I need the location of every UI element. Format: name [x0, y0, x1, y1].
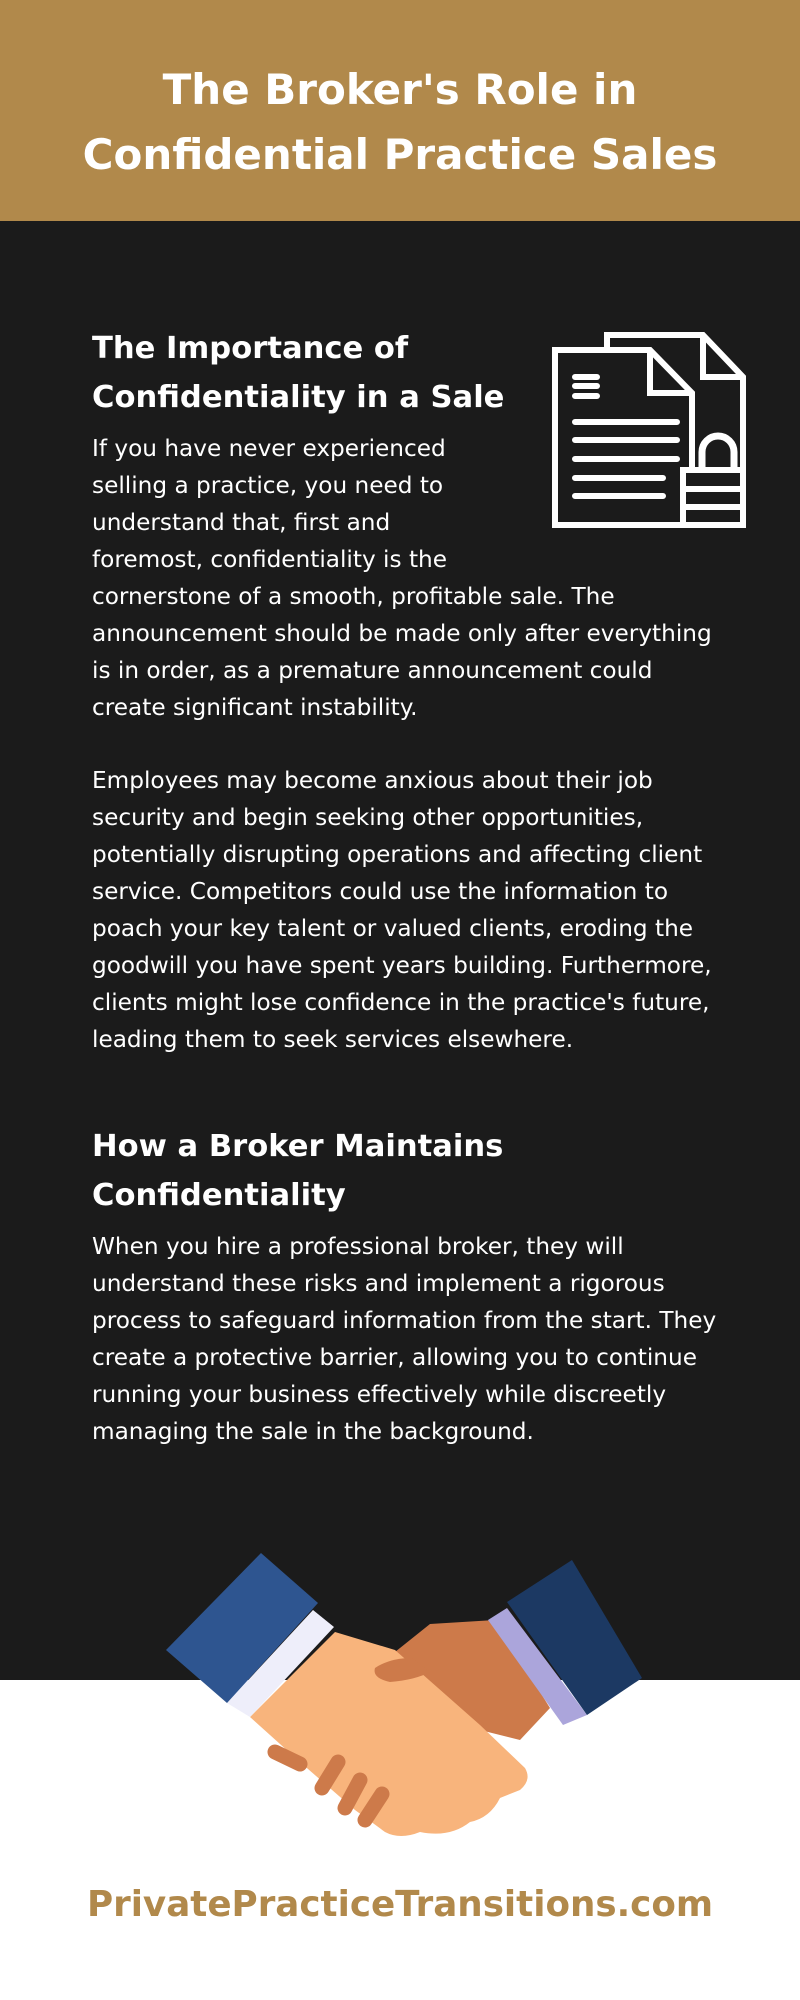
paragraph 1: cornerstone of a smooth, profitable sale. The [92, 583, 615, 610]
paragraph 2 [92, 767, 712, 1053]
heading: importance of confidentiality: Confidentiality in a Sale [92, 380, 504, 415]
paragraph 3: managing the sale in the background. [92, 1418, 534, 1445]
paragraph 2: clients might lose confidence in the practice's future, [92, 989, 710, 1016]
paragraph 3: process to safeguard information from the start. They [92, 1307, 716, 1334]
paragraph 3 [92, 1233, 716, 1445]
icon: handshake [166, 1553, 642, 1836]
heading: importance of confidentiality: The Importance of [92, 331, 408, 366]
dark content panel [0, 221, 800, 1680]
paragraph 1: understand that, first and [92, 509, 390, 536]
paragraph 1: announcement should be made only after everything [92, 620, 712, 647]
paragraph 2: potentially disrupting operations and affecting client [92, 841, 702, 868]
heading: how a broker maintains confidentiality: Confidentiality [92, 1178, 346, 1213]
title [83, 64, 717, 178]
title: The Broker's Role in [163, 64, 637, 114]
paragraph 1: If you have never experienced [92, 435, 446, 462]
paragraph 2: service. Competitors could use the information to [92, 878, 668, 905]
paragraph 2: poach your key talent or valued clients, eroding the [92, 915, 693, 942]
paragraph 2: leading them to seek services elsewhere. [92, 1026, 573, 1053]
paragraph 3: create a protective barrier, allowing you to continue [92, 1344, 697, 1371]
paragraph 1 [92, 435, 712, 721]
heading: how a broker maintains confidentiality: How a Broker Maintains [92, 1129, 503, 1164]
footer website: PrivatePracticeTransitions.com [87, 1884, 713, 1925]
paragraph 3: When you hire a professional broker, they will [92, 1233, 624, 1260]
heading: how a broker maintains confidentiality [92, 1129, 503, 1213]
header banner [0, 0, 800, 221]
paragraph 1: create significant instability. [92, 694, 418, 721]
paragraph 1: foremost, confidentiality is the [92, 546, 447, 573]
heading: importance of confidentiality [92, 331, 504, 415]
title: Confidential Practice Sales [83, 130, 717, 178]
paragraph 2: goodwill you have spent years building. Furthermore, [92, 952, 712, 979]
paragraph 1: selling a practice, you need to [92, 472, 443, 499]
paragraph 3: running your business effectively while discreetly [92, 1381, 666, 1408]
icon: locked documents [552, 332, 746, 528]
paragraph 1: is in order, as a premature announcement could [92, 657, 652, 684]
paragraph 3: understand these risks and implement a rigorous [92, 1270, 665, 1297]
paragraph 2: Employees may become anxious about their job [92, 767, 653, 794]
paragraph 2: security and begin seeking other opportunities, [92, 804, 643, 831]
